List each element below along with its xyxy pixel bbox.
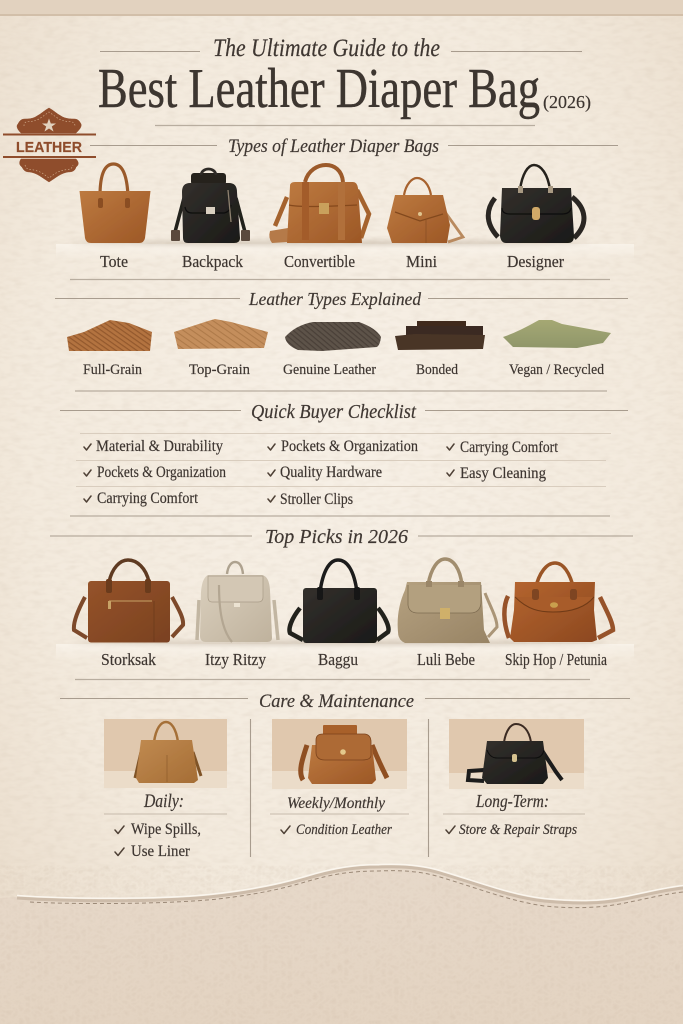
bag: itzy ritzy	[197, 562, 278, 642]
badge: leather stamp: LEATHER	[16, 139, 82, 156]
badge: leather stamp	[3, 108, 96, 182]
swatch: bonded	[395, 321, 485, 350]
item: store and repair straps: Store & Repair Straps	[459, 822, 577, 838]
label: luli bebe: Luli Bebe	[417, 650, 475, 669]
swatch: full-grain	[67, 320, 152, 351]
section: leather types explained	[55, 289, 628, 391]
bag: storksak	[74, 560, 183, 642]
label: vegan recycled: Vegan / Recycled	[509, 362, 604, 378]
item: pockets and organization: Pockets & Organization	[281, 438, 418, 455]
label: bonded: Bonded	[416, 362, 458, 378]
bag: backpack	[171, 169, 250, 243]
title: long-term: Long-Term:	[475, 791, 549, 811]
photo: daily bag	[104, 719, 227, 788]
label: designer: Designer	[507, 252, 564, 271]
label: top-grain: Top-Grain	[189, 362, 250, 378]
item: wipe spills: Wipe Spills,	[131, 821, 201, 838]
check marks	[84, 444, 454, 502]
bag: skip hop petunia	[504, 563, 613, 642]
item: carrying comfort: Carrying Comfort	[97, 490, 199, 507]
label: skip hop petunia: Skip Hop / Petunia	[505, 650, 608, 669]
title block: The Ultimate Guide to the	[213, 35, 440, 62]
swatch: vegan recycled	[503, 320, 611, 348]
label: mini: Mini	[406, 252, 437, 271]
item: pockets and organization: Pockets & Organization	[97, 464, 226, 481]
label: full-grain: Full-Grain	[83, 362, 142, 378]
label: genuine leather: Genuine Leather	[283, 362, 376, 378]
item: stroller clips: Stroller Clips	[280, 491, 353, 508]
bag: designer	[488, 165, 584, 243]
top leather band	[0, 0, 683, 16]
bag: luli bebe	[398, 559, 497, 643]
label: baggu: Baggu	[318, 650, 358, 669]
heading: types: Types of Leather Diaper Bags	[228, 137, 439, 157]
bag: tote	[80, 164, 150, 243]
label: tote: Tote	[100, 252, 128, 271]
item: material and durability: Material & Durability	[96, 438, 223, 455]
section: types of leather diaper bags	[56, 137, 634, 280]
title: daily: Daily:	[143, 791, 184, 812]
panel: daily	[104, 719, 227, 860]
section: quick buyer checklist	[60, 401, 628, 516]
item: carrying comfort: Carrying Comfort	[460, 439, 559, 456]
panel: weekly monthly	[270, 719, 409, 838]
photo: weekly bag	[272, 719, 407, 789]
bag: baggu	[289, 560, 389, 643]
title block	[98, 35, 591, 126]
label: storksak: Storksak	[101, 650, 157, 669]
section: top picks	[50, 526, 634, 680]
bottom leather panel with stitched seam	[0, 864, 683, 1024]
photo: long-term bag	[449, 719, 584, 789]
heading: care: Care & Maintenance	[259, 692, 414, 712]
item: quality hardware: Quality Hardware	[280, 464, 382, 481]
title block: (2026)	[543, 92, 591, 113]
swatch: top-grain	[174, 319, 268, 349]
section: care and maintenance	[60, 692, 630, 860]
heading: top picks: Top Picks in 2026	[265, 526, 409, 548]
panel: long-term	[443, 719, 585, 838]
bag: convertible	[269, 165, 369, 243]
label: backpack: Backpack	[182, 252, 244, 271]
label: itzy ritzy: Itzy Ritzy	[205, 650, 267, 669]
item: use liner: Use Liner	[131, 843, 191, 860]
bag: mini	[387, 178, 463, 243]
swatch: genuine leather	[285, 322, 381, 351]
heading: checklist: Quick Buyer Checklist	[251, 401, 416, 423]
title block: Best Leather Diaper Bag	[98, 58, 540, 120]
heading: leather types: Leather Types Explained	[248, 289, 421, 309]
item: easy cleaning: Easy Cleaning	[460, 465, 546, 482]
title: weekly monthly: Weekly/Monthly	[287, 795, 386, 812]
label: convertible: Convertible	[284, 252, 355, 271]
item: condition leather: Condition Leather	[296, 822, 392, 838]
